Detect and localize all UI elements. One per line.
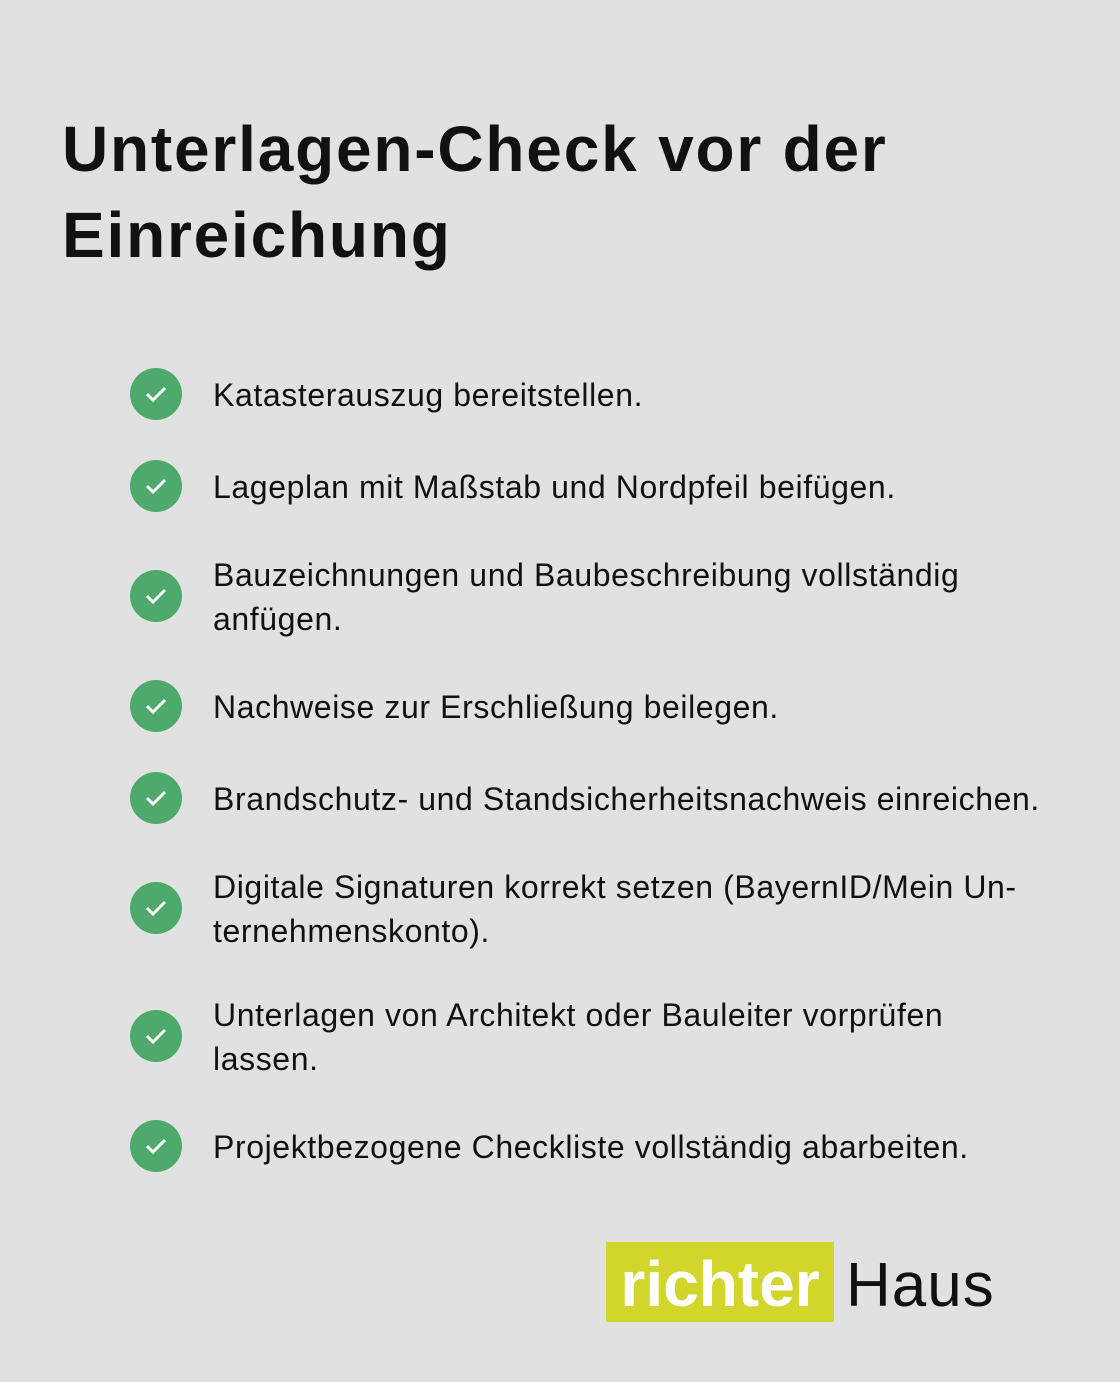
item 3: [130, 557, 959, 637]
item 4: [130, 680, 779, 732]
item 4: Nachweise zur Erschließung beilegen.: [213, 689, 779, 725]
item 2: Lageplan mit Maßstab und Nordpfeil beifügen.: [213, 469, 896, 505]
item 1: [130, 368, 643, 420]
item 1: Katasterauszug bereitstellen.: [213, 377, 643, 413]
item 7: [130, 997, 943, 1077]
item 8: Projektbezogene Checkliste vollständig abarbeiten.: [213, 1129, 969, 1165]
title: [62, 113, 888, 271]
item 6: Digitale Signaturen korrekt setzen (BayernID/Mein Un-: [213, 869, 1017, 905]
item 5: Brandschutz- und Standsicherheitsnachweis einreichen.: [213, 781, 1040, 817]
logo box: richter: richter: [620, 1248, 820, 1320]
item 5: [130, 772, 1040, 824]
title: Unterlagen-Check vor der: [62, 113, 888, 185]
item 7: lassen.: [213, 1041, 319, 1077]
item 8: [130, 1120, 969, 1172]
logo text: Haus: Haus: [846, 1251, 995, 1320]
title: Einreichung: [62, 199, 452, 271]
item 2: [130, 460, 896, 512]
item 6: ternehmenskonto).: [213, 913, 490, 949]
item 6: [130, 869, 1017, 949]
item 3: Bauzeichnungen und Baubeschreibung vollständig: [213, 557, 959, 593]
item 3: anfügen.: [213, 601, 342, 637]
item 7: Unterlagen von Architekt oder Bauleiter vorprüfen: [213, 997, 943, 1033]
logo: [606, 1242, 995, 1322]
